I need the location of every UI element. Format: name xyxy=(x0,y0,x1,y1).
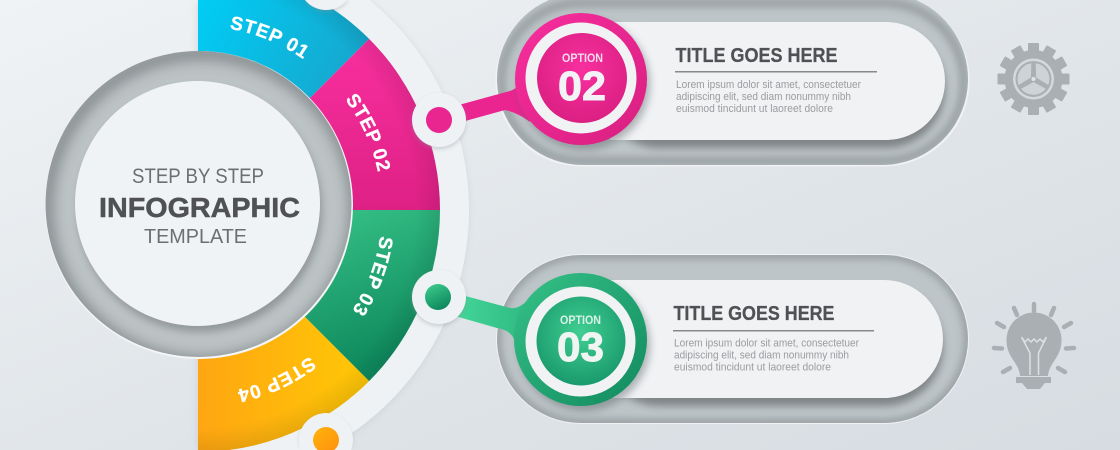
icon: light bulb xyxy=(994,304,1074,389)
badge: option 02: OPTION xyxy=(562,53,603,65)
outer ring shadow xyxy=(198,2,468,450)
outer white ring xyxy=(198,0,469,450)
wedge: step 02: STEP 02 xyxy=(346,94,390,172)
card title: TITLE GOES HERE xyxy=(676,44,838,67)
card: option 03 xyxy=(514,273,943,411)
wedge: step 01: STEP 01 xyxy=(230,16,308,59)
disc face xyxy=(75,81,320,326)
disc groove xyxy=(46,51,356,363)
card body text: Lorem ipsum dolor sit amet, consectetuer xyxy=(674,338,859,350)
bulb filament xyxy=(1022,337,1046,375)
center title text: TEMPLATE xyxy=(144,225,247,248)
card body text: adipiscing elit, sed diam nonummy nibh xyxy=(676,91,851,103)
badge: option 03: OPTION xyxy=(560,315,601,327)
badge: option 03 xyxy=(514,273,650,411)
card body text: adipiscing elit, sed diam nonummy nibh xyxy=(674,350,849,362)
center disc with title xyxy=(45,51,356,363)
card body text xyxy=(674,338,859,374)
card body text: euismod tincidunt ut laoreet dolore xyxy=(674,362,831,374)
center title text: STEP BY STEP xyxy=(132,165,264,188)
wedge: step 01 xyxy=(198,0,369,98)
badge: option 03: 03 xyxy=(557,324,604,370)
wedge: step 02 xyxy=(310,38,440,210)
node: bottom (orange) xyxy=(299,413,353,450)
connector: option 02 xyxy=(455,78,530,123)
badge: option 02 xyxy=(515,13,650,150)
card body xyxy=(610,22,945,140)
panel: option 02 groove xyxy=(495,0,970,167)
node: top (blue) xyxy=(304,0,348,12)
badge: option 02: 02 xyxy=(558,63,606,109)
card title: TITLE GOES HERE xyxy=(674,302,834,325)
bulb base xyxy=(1016,377,1051,389)
node: option 03 xyxy=(412,270,466,326)
node: option 02 xyxy=(412,93,466,149)
bulb rays xyxy=(994,304,1074,372)
bulb glass xyxy=(1006,312,1062,376)
card body text xyxy=(676,79,861,115)
icon: gear xyxy=(998,43,1070,115)
card body xyxy=(610,280,943,398)
card body text: euismod tincidunt ut laoreet dolore xyxy=(676,103,833,115)
wedge: step 04: STEP 04 xyxy=(238,358,316,402)
wedge: step 04 xyxy=(198,316,369,450)
card body text: Lorem ipsum dolor sit amet, consectetuer xyxy=(676,79,861,91)
wedge: step 03: STEP 03 xyxy=(354,236,393,316)
wheel of step wedges xyxy=(198,0,440,450)
panel: option 03 groove xyxy=(496,254,969,424)
disc highlight edge xyxy=(45,51,353,359)
title underline xyxy=(675,71,877,72)
center title text xyxy=(99,165,300,248)
title underline xyxy=(673,330,874,332)
card: option 02 xyxy=(515,13,945,150)
connector: option 03 xyxy=(455,294,530,360)
wedge: step 03 xyxy=(304,210,440,382)
center title text: INFOGRAPHIC xyxy=(99,192,300,223)
